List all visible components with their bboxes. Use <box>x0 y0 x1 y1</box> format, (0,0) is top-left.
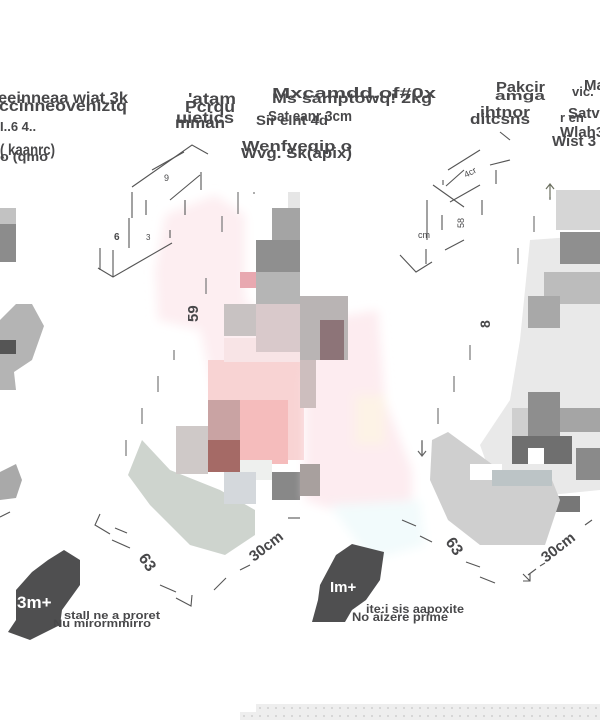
panel: grey rocker right <box>430 432 560 545</box>
text block: far right column: Satv <box>568 105 600 122</box>
label: bottom right width: 30cm <box>538 529 579 566</box>
dashed height line: right horse <box>422 197 550 456</box>
text block: far right column: vic. <box>572 84 594 99</box>
label: right package numbers: 4cr <box>462 165 478 180</box>
text block: centre column: Wvg. Sk(apix) <box>241 145 352 162</box>
caption: right badge <box>352 602 464 624</box>
text block: centre left column <box>175 91 236 132</box>
text block: centre left column: 'atam <box>188 91 236 108</box>
text block: far right column <box>552 77 600 150</box>
text block: centre column: Sat eanr 3cm <box>268 108 352 125</box>
dashed height line: left horse <box>126 192 254 456</box>
badge: right age: Im+ <box>330 579 357 596</box>
dimension lines: bottom right <box>402 520 592 583</box>
text block: right centre column: amga <box>495 88 546 103</box>
label: bottom left depth: 63 <box>135 551 159 575</box>
text block: centre left column: mman <box>175 115 225 132</box>
caption: left badge: Nu mirormmirro <box>53 618 151 630</box>
label: left package numbers: 3 <box>146 233 151 242</box>
text block: top left column: eeinneaa wiat 3k <box>0 90 128 107</box>
text block: centre left column: uietics <box>176 110 234 127</box>
label: right package numbers: cm <box>418 230 430 240</box>
icon: up arrow right height <box>546 184 554 199</box>
label: left package numbers: 9 <box>164 173 169 183</box>
label: left package numbers <box>114 173 169 243</box>
text block: right centre column <box>470 79 546 128</box>
label: right package numbers <box>418 165 478 240</box>
badge: left age <box>8 550 80 640</box>
badge: right age <box>312 544 384 622</box>
caption: left badge <box>53 610 160 630</box>
panel: grey fragment far left <box>0 208 44 500</box>
text block: top left column: ( kaanrc) <box>0 142 55 159</box>
text block: far right column: r en <box>560 110 584 125</box>
text block: centre left column: Pcrqu <box>185 99 235 116</box>
label: bottom left width: 30cm <box>246 528 287 565</box>
text block: right centre column: Pakcir <box>496 79 545 96</box>
badge: left age: 3m+ <box>17 593 52 612</box>
panel: grey saddle centre <box>300 296 348 496</box>
panel: green rocker left <box>128 440 255 555</box>
label: left package numbers: 6 <box>114 232 120 243</box>
text block: centre column: Sir elnt 4d <box>256 112 328 128</box>
label: right horse height: 8 <box>477 320 493 328</box>
caption: left badge: stall ne a proret <box>64 610 160 622</box>
label: right package numbers: 58 <box>456 218 466 228</box>
icon: down arrow right height <box>418 441 426 456</box>
text block: far right column: Wist 3 <box>552 133 596 150</box>
text block: top left column: ccinneoveniztq <box>0 98 127 115</box>
text block: centre column: Mxcamdd.of#0x <box>272 85 437 102</box>
text block: right centre column: ditcsns <box>470 111 530 128</box>
text block: centre column: Wenfyeqip o <box>242 138 352 155</box>
text block: right centre column: ihtnor <box>480 104 530 121</box>
dimension box: left package <box>98 145 208 277</box>
label: left horse height: 59 <box>185 305 202 322</box>
dimension lines: bottom left <box>0 512 300 606</box>
text block: centre column: Ms samptowq! 2kg <box>272 90 432 106</box>
dimension box: right package <box>400 132 510 272</box>
text block: top left column: I..6 4.. <box>0 119 36 134</box>
text block: centre column <box>241 85 437 162</box>
panel: pink horse body <box>176 338 304 504</box>
panel: grey mane and saddle left horse <box>224 192 300 352</box>
caption: right badge: ite:i sis aapoxite <box>366 602 464 616</box>
footer band: dotted strip <box>240 704 600 720</box>
text block: top left column: o (qmo <box>0 149 48 164</box>
panel: pale pink centre <box>305 310 425 560</box>
caption: right badge: No aizere prime <box>352 610 448 624</box>
label: bottom right depth: 63 <box>442 535 466 559</box>
panel: pink pale horse left <box>155 195 300 440</box>
panel: grey horse right <box>480 190 600 512</box>
text block: top left column <box>0 90 128 164</box>
